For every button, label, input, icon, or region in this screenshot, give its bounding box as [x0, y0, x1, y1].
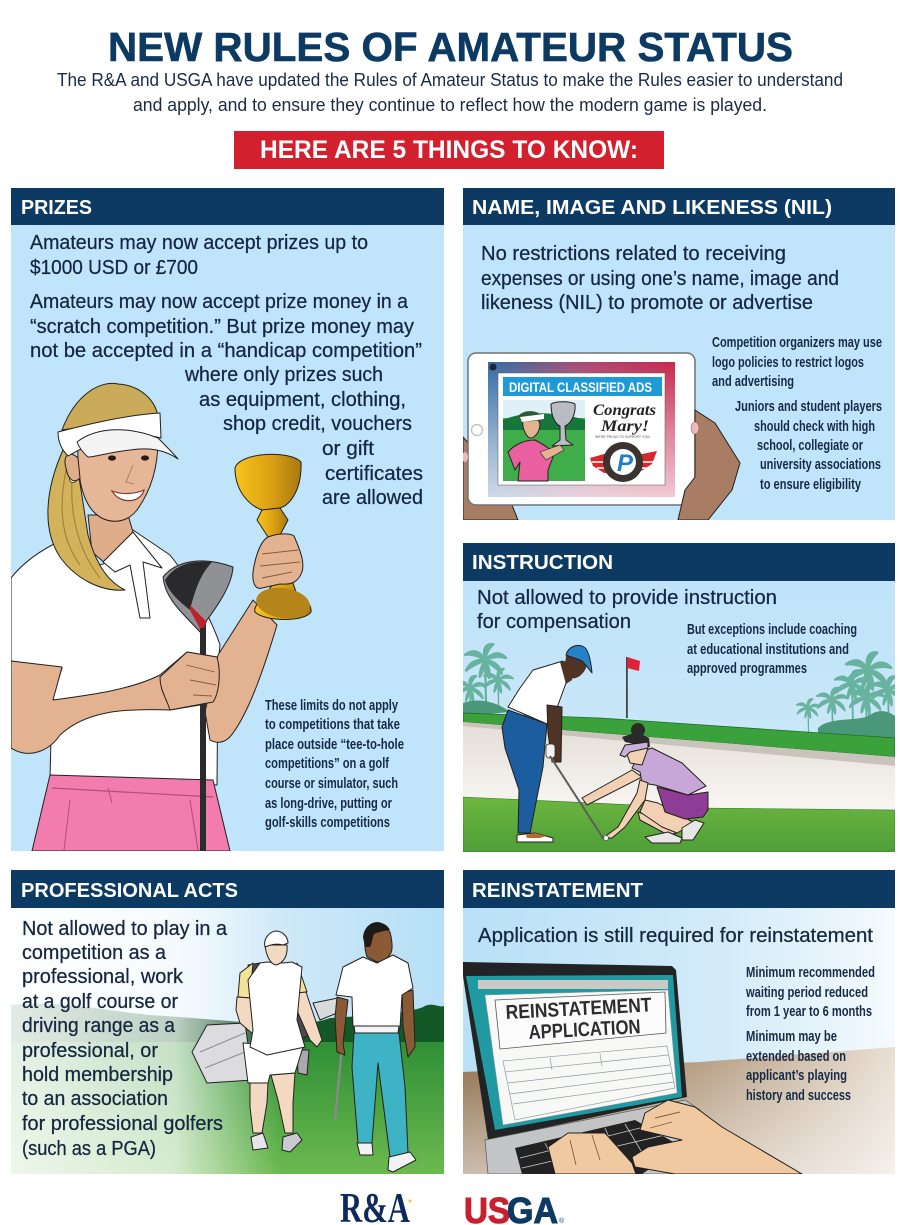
note: minimum may be extended: Minimum may be	[746, 1028, 837, 1045]
intro text: The R&A and USGA have updated the Rules of Amateur Status to make the Rules easier to understand	[57, 70, 843, 90]
figure: instructor	[502, 645, 592, 842]
text block: prize limits: where only prizes such	[184, 364, 383, 386]
ad illustration: golfer with trophy	[503, 400, 585, 481]
intro text	[57, 70, 843, 115]
text block: professional acts: Not allowed to play in a	[22, 918, 228, 940]
text block: prize limits: $1000 USD or £700	[30, 257, 198, 279]
intro text: and apply, and to ensure they continue to reflect how the modern game is played.	[133, 95, 767, 115]
form fields	[503, 1046, 675, 1120]
note: juniors and students: school, collegiate or	[757, 437, 863, 454]
ad message: Mary!	[600, 418, 649, 435]
text block: no restrictions: likeness (NIL) to promote or advertise	[481, 292, 813, 314]
text block: professional acts: hold membership	[22, 1064, 173, 1086]
text block: application: Application is still required for reinstatement	[478, 925, 873, 947]
text block: professional acts: (such as a PGA)	[22, 1138, 156, 1160]
text block: prize limits: certificates	[325, 463, 423, 485]
text block: prize limits	[30, 232, 423, 509]
ad message	[594, 404, 656, 438]
panel: instruction	[455, 543, 900, 852]
figure: woman teeing up ball	[582, 723, 708, 843]
red banner	[234, 131, 664, 169]
text block: prize limits: are allowed	[322, 487, 423, 509]
text block: prize limits: or gift	[322, 438, 374, 460]
illustration: caddie and golfer on course	[11, 908, 444, 1174]
note: exceptions: at educational institutions and	[687, 641, 849, 658]
heading: reinstatement: REINSTATEMENT	[472, 879, 643, 902]
icon: red flag	[626, 657, 640, 718]
title: NEW RULES OF AMATEUR STATUS	[108, 24, 793, 70]
illustration: laptop with application form	[463, 962, 895, 1174]
note: minimum may be extended: extended based on	[746, 1048, 846, 1065]
heading: NIL	[463, 188, 895, 225]
note: waiting period	[745, 964, 875, 1020]
text block: professional acts: professional, or	[22, 1040, 158, 1062]
illustration: bunker lesson scene	[455, 644, 900, 852]
note: limits do not apply: These limits do not apply	[265, 697, 398, 714]
text block: professional acts: competition as a	[22, 942, 167, 964]
figure: golfer	[335, 922, 416, 1172]
note: logo policies	[712, 334, 882, 390]
icon: winged P badge: P	[617, 450, 634, 477]
text block: instruction: Not allowed to provide instruction	[477, 587, 777, 609]
text block: professional acts: professional, work	[22, 966, 184, 988]
heading: professional acts	[11, 870, 444, 908]
panel: prizes	[11, 188, 444, 851]
hands on keyboard	[548, 1100, 802, 1174]
logo: USGA	[464, 1190, 565, 1225]
text block: prize limits: as equipment, clothing,	[199, 389, 406, 411]
note: juniors and students	[735, 398, 882, 493]
text block: no restrictions	[481, 243, 839, 314]
note: limits do not apply	[265, 697, 404, 831]
note: limits do not apply: golf-skills competitions	[265, 814, 390, 831]
note: exceptions: approved programmes	[687, 660, 807, 677]
note: minimum may be extended: history and success	[746, 1087, 851, 1104]
illustration: woman golfer with trophy and driver	[11, 383, 312, 851]
note: limits do not apply: course or simulator, such	[265, 775, 398, 792]
panel: professional acts	[11, 870, 444, 1174]
note: minimum may be extended: applicant’s playing	[746, 1067, 847, 1084]
ad message: WE'RE PROUD TO SUPPORT YOU!	[595, 434, 650, 439]
panel: name, image and likeness	[462, 188, 895, 520]
text block: professional acts: at a golf course or	[22, 991, 178, 1013]
text block: no restrictions: No restrictions related to receiving	[481, 243, 786, 265]
form title: APPLICATION	[528, 1016, 641, 1044]
text block: professional acts: to an association	[22, 1088, 168, 1110]
heading: reinstatement	[463, 870, 895, 908]
text block: prize limits: “scratch competition.” But prize money may	[30, 316, 414, 338]
note: limits do not apply: place outside “tee-to-hole	[265, 736, 404, 753]
text block: professional acts: driving range as a	[22, 1015, 176, 1037]
heading: prizes	[11, 188, 444, 225]
logo: USGA: ®	[559, 1217, 565, 1225]
note: juniors and students: to ensure eligibility	[760, 476, 861, 493]
note: logo policies: and advertising	[712, 373, 794, 390]
text block: prize limits: not be accepted in a “handicap competition”	[30, 340, 422, 362]
red banner: HERE ARE 5 THINGS TO KNOW:	[260, 136, 638, 164]
form title	[506, 998, 651, 1039]
text block: professional acts	[22, 918, 228, 1160]
text block: no restrictions: expenses or using one’s name, image and	[481, 268, 839, 290]
ad banner: DIGITAL CLASSIFIED ADS	[509, 379, 652, 395]
illustration: tablet with digital classified ad	[462, 353, 740, 520]
text block: prize limits: Amateurs may now accept prizes up to	[30, 232, 368, 254]
background palms	[455, 644, 900, 740]
text block: prize limits: Amateurs may now accept prize money in a	[30, 291, 409, 313]
heading: instruction: INSTRUCTION	[472, 551, 613, 574]
icon: winged P badge	[590, 442, 657, 482]
note: limits do not apply: to competitions that take	[265, 716, 400, 733]
form title: REINSTATEMENT	[505, 994, 652, 1024]
heading: prizes: PRIZES	[21, 196, 92, 219]
text block: prize limits: shop credit, vouchers	[223, 413, 412, 435]
note: exceptions	[687, 621, 857, 677]
ad message: Congrats	[593, 402, 656, 419]
heading: NIL: NAME, IMAGE AND LIKENESS (NIL)	[472, 196, 832, 219]
heading: professional acts: PROFESSIONAL ACTS	[21, 879, 238, 902]
panel: reinstatement	[463, 870, 895, 1174]
text block: instruction: for compensation	[477, 611, 631, 633]
note: minimum may be extended	[746, 1028, 851, 1104]
heading: instruction	[463, 543, 895, 581]
figure: caddie with bag	[192, 931, 338, 1152]
note: limits do not apply: competitions” on a golf	[265, 755, 390, 772]
text block: instruction	[477, 587, 777, 633]
text block: professional acts: for professional golfers	[22, 1113, 223, 1135]
note: limits do not apply: as long-drive, putting or	[265, 795, 392, 812]
